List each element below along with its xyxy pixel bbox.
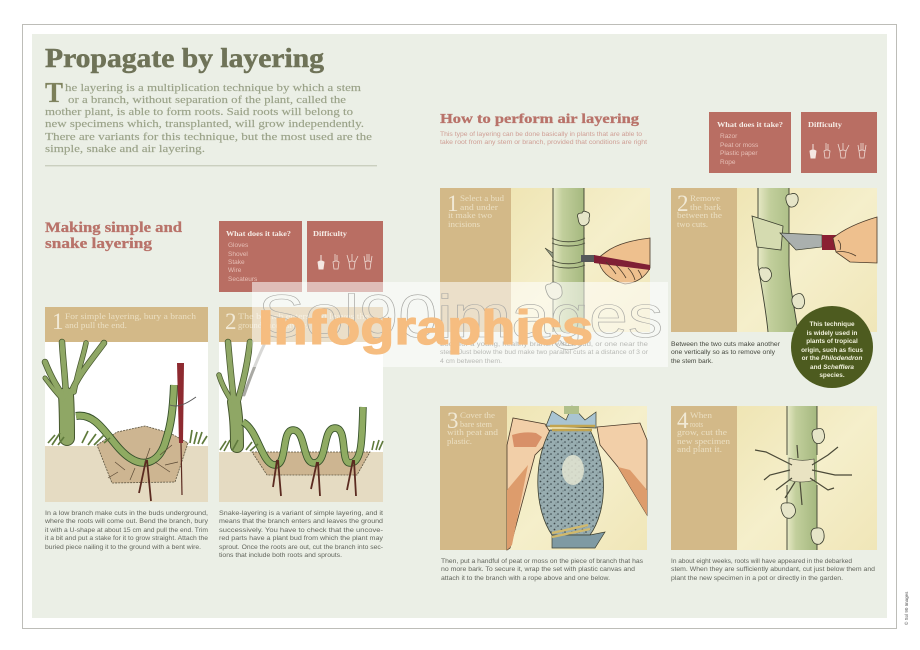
intro text block: simple, snake and air layering. <box>45 143 205 155</box>
callout: tropical plants: or the Philodendron <box>802 355 862 362</box>
box: difficulty (air): Difficulty <box>808 121 843 129</box>
box: what does it take (air): Razor <box>720 133 738 140</box>
mound of soil <box>252 452 370 475</box>
air step 1 caption <box>440 341 649 365</box>
air step 2 caption: one vertically so as to remove only <box>671 349 776 356</box>
callout: tropical plants: origin, such as ficus <box>801 347 863 354</box>
intro text block <box>45 78 372 155</box>
heading: simple and snake layering <box>45 220 183 252</box>
box: what does it take (simple): Stake <box>228 259 245 266</box>
step 1 text: 1 <box>447 191 458 216</box>
box: difficulty (air) <box>801 112 877 173</box>
step 2 text <box>677 191 722 229</box>
wire tie <box>170 397 196 406</box>
step 2 caption: means that the branch enters and leaves the ground <box>219 518 383 525</box>
step 3 text <box>447 408 499 446</box>
step 1 caption: it with a U-shape at about 15 cm and pull the end. Trim <box>45 527 208 534</box>
air step 3 caption: Then, put a handful of peat or moss on the piece of branch that has <box>441 558 644 565</box>
step 2 caption: sprout. Once the roots are out, cut the branch into sec- <box>219 544 383 551</box>
callout: tropical plants: and Schefflera <box>810 364 854 371</box>
air step 4 caption: plant the new specimen in a pot or directly in the garden. <box>671 575 843 582</box>
step 2 caption: red parts have a plant bud from which the plant may <box>219 535 384 542</box>
watermark: Sol90images <box>258 283 663 350</box>
step 3 text: bare stem <box>460 419 492 429</box>
air step 4 caption <box>671 558 875 582</box>
box: what does it take (simple): Wire <box>228 267 242 274</box>
step 1 caption: In a low branch make cuts in the buds underground, <box>45 510 208 517</box>
illustration: simple layering <box>45 342 208 502</box>
air step 4 caption: In about eight weeks, roots will have appeared in the debarked <box>671 558 852 565</box>
air step 3 panel <box>440 406 647 550</box>
illustration: cutting the stem <box>511 188 650 332</box>
air step 2 panel <box>671 188 877 332</box>
intro text block: There are variants for this technique, but the most used are the <box>45 131 372 143</box>
step 3 text: plastic. <box>447 436 472 446</box>
box: what does it take (air): What does it take? <box>717 121 784 129</box>
grass <box>48 430 207 445</box>
step 4 text: roots <box>690 419 703 429</box>
callout: tropical plants: This technique <box>809 321 855 328</box>
step 3 text: with peat and <box>447 427 499 437</box>
step 1 text: it make two <box>448 210 492 220</box>
icon: hand gestures, level one of four <box>810 143 866 158</box>
air layering intro: This type of layering can be done basically in plants that are able to <box>440 131 642 138</box>
step 2 text: 2 <box>677 191 688 216</box>
title: Propagate by layering <box>45 43 325 73</box>
box: what does it take (air): Plastic paper <box>720 150 758 157</box>
box: what does it take (air) <box>709 112 791 173</box>
step 1 text <box>447 191 505 229</box>
watermark: Infographics <box>258 302 593 355</box>
credit: © Sol 90 Images <box>903 591 909 625</box>
peg <box>139 460 151 501</box>
box: difficulty (simple): Difficulty <box>313 230 348 238</box>
illustration: wrapping with plastic <box>507 406 647 550</box>
air step 1 caption: stem. Just below the bud make two parallel cuts at a distance of 3 or <box>440 349 649 356</box>
box: what does it take (simple): Gloves <box>228 242 249 249</box>
step 1 header: simple layering <box>45 307 208 342</box>
step 2 header: snake layering <box>219 307 383 342</box>
callout: tropical plants <box>791 306 873 388</box>
tree <box>45 342 104 438</box>
step 2 caption: tions that include both roots and sprouts. <box>219 552 342 559</box>
pegs <box>273 460 356 496</box>
air step 4 caption: stem. When they are sufficiently abundant, cut just below them and <box>671 566 875 573</box>
heading: air layering: How to perform air layering <box>440 112 639 127</box>
step 2 caption <box>219 510 384 559</box>
intro text block: or a branch, without separation of the plant, called the <box>68 94 346 106</box>
air step 3 caption <box>441 558 644 582</box>
step 4 text: new specimen <box>677 436 731 446</box>
intro text block: he layering is a multiplication technique by which a stem <box>65 82 362 94</box>
step 2 text: between the <box>677 210 722 220</box>
step 2 text: Remove <box>690 193 720 203</box>
grass <box>220 440 383 451</box>
step 2 header: snake layering: 2 <box>225 309 236 334</box>
box: what does it take (simple): What does it take? <box>226 230 292 238</box>
air step 2 caption: the stem bark. <box>671 358 713 365</box>
box: what does it take (simple): Shovel <box>228 251 248 258</box>
heading: simple and snake layering: snake layering <box>45 236 153 252</box>
step 2 text: two cuts. <box>677 219 708 229</box>
step 3 text: 3 <box>447 408 458 433</box>
illustration: new roots <box>737 406 877 550</box>
heading: simple and snake layering: Making simple and <box>45 220 183 236</box>
step 1 text: Select a bud <box>460 193 505 203</box>
mound of soil <box>97 426 188 483</box>
callout: tropical plants: species. <box>819 372 845 379</box>
air step 1 caption: 4 cm between them. <box>440 358 502 365</box>
step 2 header: snake layering: ground successively. <box>238 320 308 330</box>
air layering intro <box>440 131 647 146</box>
step 2 caption: Snake-layering is a variant of simple layering, and it <box>219 510 383 517</box>
intro text block: new specimens which, transplanted, will grow independently. <box>45 118 364 130</box>
step 2 caption: successively. You have to check that the uncove- <box>219 527 383 534</box>
box: what does it take (air): Peat or moss <box>720 142 759 149</box>
step 4 text: and plant it. <box>677 444 722 454</box>
step 4 text: grow, cut the <box>677 427 727 437</box>
step 1 caption <box>44 510 209 551</box>
step 2 text: the bark <box>690 202 722 212</box>
step 2 header: snake layering: The branch enters and leaves the <box>238 311 369 321</box>
step 1 header: simple layering: 1 <box>52 309 64 334</box>
air step 1 panel <box>440 188 650 332</box>
drop cap: T <box>45 78 63 109</box>
air step 3 caption: attach it to the branch with a rope above and one below. <box>441 575 610 582</box>
icon: hand gestures, level one of four <box>318 254 372 269</box>
air step 2 caption <box>671 341 781 365</box>
step 1 text: incisions <box>448 219 480 229</box>
callout: tropical plants: is widely used in <box>807 330 857 337</box>
snaking branch <box>243 407 363 465</box>
step 1 caption: it a bit and put a stake for it to grow straight. Attach the <box>45 535 208 542</box>
step 1 header: simple layering: and pull the end. <box>65 320 127 330</box>
roots <box>108 445 178 480</box>
callout: tropical plants: plants of tropical <box>806 338 858 345</box>
intro text block: mother plant, is able to form roots. Said roots will belong to <box>45 106 354 118</box>
air step 1 caption: Look for a young, healthy branch with a bud, or one near the <box>440 341 648 348</box>
box: what does it take (simple) <box>219 221 302 292</box>
step 3 text: Cover the <box>460 410 495 420</box>
air step 2 caption: Between the two cuts make another <box>671 341 781 348</box>
step 4 text: When <box>690 410 713 420</box>
illustration: removing the bark <box>737 188 877 332</box>
stake <box>177 363 184 443</box>
watermark <box>252 282 668 367</box>
air step 3 caption: no more bark. To secure it, wrap the set with plastic canvas and <box>441 566 635 573</box>
step 1 caption: buried piece nailing it to the ground with a bent wire. <box>45 544 201 551</box>
tree <box>219 342 264 446</box>
step 1 header: simple layering: For simple layering, bury a branch <box>65 311 197 321</box>
step 4 text <box>677 408 731 454</box>
bent branch <box>76 385 174 463</box>
step 4 text: 4 <box>677 408 689 433</box>
step 1 text: and under <box>460 202 498 212</box>
illustration: snake layering <box>219 342 383 502</box>
step 1 caption: where the roots will come out. Bend the branch, bury <box>44 518 209 525</box>
air step 4 panel <box>671 406 877 550</box>
air layering intro: take root from any stem or branch, provided that conditions are right <box>440 139 647 146</box>
box: what does it take (air): Rope <box>720 159 736 166</box>
box: difficulty (simple) <box>307 221 383 292</box>
box: what does it take (simple): Secateurs <box>228 276 258 283</box>
